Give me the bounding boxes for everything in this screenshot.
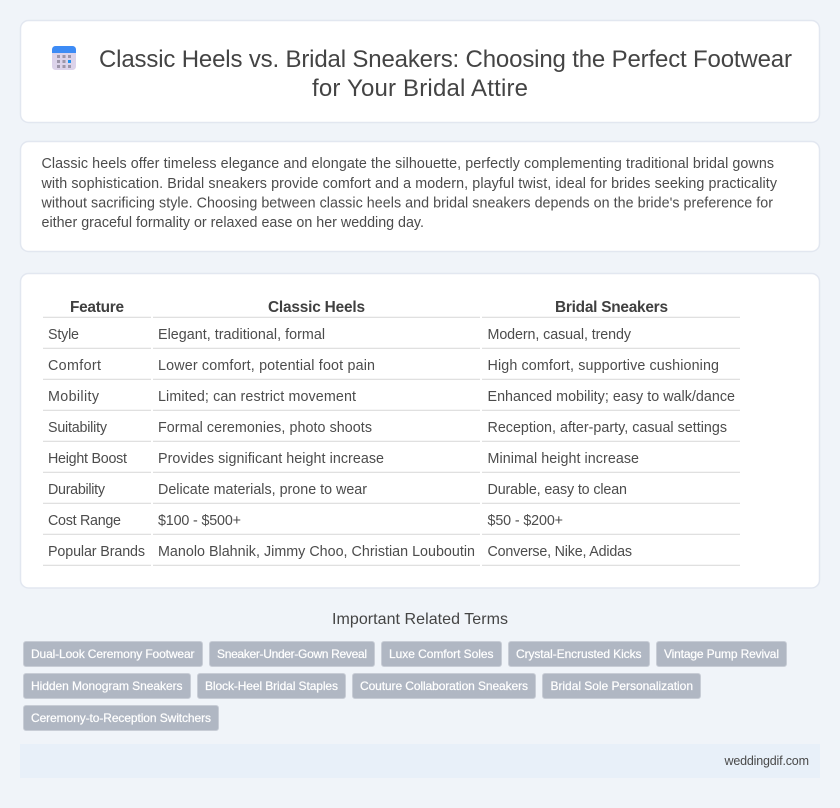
tag: Ceremony-to-Reception Switchers: Ceremony-to-Reception Switchers bbox=[31, 711, 211, 725]
table row: cost range: $50 - $200+ bbox=[488, 513, 563, 529]
table header row: Feature bbox=[70, 299, 124, 316]
table row: mobility bbox=[48, 389, 735, 405]
tag: Block-Heel Bridal Staples bbox=[198, 674, 346, 698]
table row: cost range: Cost Range bbox=[48, 513, 121, 529]
table row: comfort: Comfort bbox=[48, 358, 101, 374]
text block: introduction paragraph: either graceful formality or relaxed ease on her wedding day. bbox=[42, 215, 424, 231]
text block: introduction paragraph: Classic heels offer timeless elegance and elongate the silhouette, perfectly complementing traditional bridal gowns bbox=[42, 156, 774, 172]
table row: popular brands: Converse, Nike, Adidas bbox=[488, 544, 632, 560]
tag: Sneaker-Under-Gown Reveal bbox=[210, 642, 374, 666]
tag: Sneaker-Under-Gown Reveal: Sneaker-Under-Gown Reveal bbox=[217, 647, 367, 661]
table row: height boost: Provides significant height increase bbox=[158, 451, 384, 467]
table row: style bbox=[48, 327, 632, 343]
tag: Hidden Monogram Sneakers bbox=[24, 674, 190, 698]
table row: style: Elegant, traditional, formal bbox=[158, 327, 325, 343]
table row: durability: Durability bbox=[48, 482, 106, 498]
table row: style: Modern, casual, trendy bbox=[488, 327, 632, 343]
icon: calendar bbox=[52, 46, 76, 70]
table header row: Classic Heels bbox=[268, 299, 365, 316]
table row: mobility: Mobility bbox=[48, 389, 100, 405]
table row: style: Style bbox=[48, 327, 79, 343]
tag: Bridal Sole Personalization bbox=[542, 674, 700, 698]
table row: comfort bbox=[48, 358, 719, 374]
table row: suitability: Reception, after-party, casual settings bbox=[488, 420, 727, 436]
text block: introduction paragraph bbox=[40, 156, 778, 231]
text block: introduction paragraph: with sophistication. Bridal sneakers provide comfort and a modern, playful twist, ideal for brides seeking practicality bbox=[40, 176, 778, 192]
table row: suitability: Suitability bbox=[48, 420, 108, 436]
table row: mobility: Enhanced mobility; easy to walk/dance bbox=[488, 389, 735, 405]
title bbox=[99, 46, 792, 102]
title: Classic Heels vs. Bridal Sneakers: Choosing the Perfect Footwear bbox=[99, 46, 792, 73]
text block: introduction paragraph: without sacrificing style. Choosing between classic heels and bridal sneakers depends on the bride's preference for bbox=[40, 196, 773, 212]
tag: Bridal Sole Personalization: Bridal Sole Personalization bbox=[550, 679, 693, 693]
panel: introduction bbox=[20, 142, 820, 252]
tag: Crystal-Encrusted Kicks bbox=[508, 642, 650, 666]
table row: suitability: Formal ceremonies, photo shoots bbox=[158, 420, 372, 436]
table row: popular brands: Popular Brands bbox=[48, 544, 145, 560]
table row: cost range bbox=[48, 513, 563, 529]
table row: durability bbox=[48, 482, 627, 498]
table row: popular brands bbox=[48, 544, 632, 560]
table row: mobility: Limited; can restrict movement bbox=[158, 389, 356, 405]
table row: durability: Durable, easy to clean bbox=[488, 482, 627, 498]
table row: durability: Delicate materials, prone to wear bbox=[158, 482, 367, 498]
table row: height boost: Height Boost bbox=[48, 451, 127, 467]
tag: Vintage Pump Revival bbox=[656, 642, 786, 666]
tag: Ceremony-to-Reception Switchers bbox=[24, 706, 218, 730]
tag: Dual-Look Ceremony Footwear bbox=[24, 642, 202, 666]
footer: weddingdif.com bbox=[724, 754, 809, 768]
tag: Hidden Monogram Sneakers: Hidden Monogram Sneakers bbox=[31, 679, 182, 693]
heading: important related terms: Important Related Terms bbox=[332, 611, 508, 628]
table header row bbox=[70, 299, 668, 316]
table row: cost range: $100 - $500+ bbox=[158, 513, 241, 529]
table row: comfort: Lower comfort, potential foot pain bbox=[158, 358, 375, 374]
panel: comparison table bbox=[20, 274, 820, 588]
tag: Block-Heel Bridal Staples: Block-Heel Bridal Staples bbox=[205, 679, 338, 693]
tag: Luxe Comfort Soles bbox=[382, 642, 502, 666]
title: for Your Bridal Attire bbox=[312, 75, 528, 102]
tag: Luxe Comfort Soles: Luxe Comfort Soles bbox=[389, 647, 494, 661]
table row: height boost: Minimal height increase bbox=[488, 451, 639, 467]
table row: suitability bbox=[48, 420, 727, 436]
panel: related term tags bbox=[24, 642, 786, 730]
tag: Dual-Look Ceremony Footwear: Dual-Look Ceremony Footwear bbox=[31, 647, 194, 661]
table header row: Bridal Sneakers bbox=[555, 299, 668, 316]
table row: popular brands: Manolo Blahnik, Jimmy Choo, Christian Louboutin bbox=[158, 544, 475, 560]
tag: Vintage Pump Revival: Vintage Pump Revival bbox=[664, 647, 779, 661]
tag: Crystal-Encrusted Kicks: Crystal-Encrusted Kicks bbox=[516, 647, 642, 661]
table row: height boost bbox=[48, 451, 639, 467]
table row: comfort: High comfort, supportive cushioning bbox=[488, 358, 719, 374]
tag: Couture Collaboration Sneakers bbox=[352, 674, 536, 698]
panel: header bbox=[20, 20, 820, 122]
tag: Couture Collaboration Sneakers: Couture Collaboration Sneakers bbox=[360, 679, 528, 693]
footer bbox=[20, 744, 820, 778]
